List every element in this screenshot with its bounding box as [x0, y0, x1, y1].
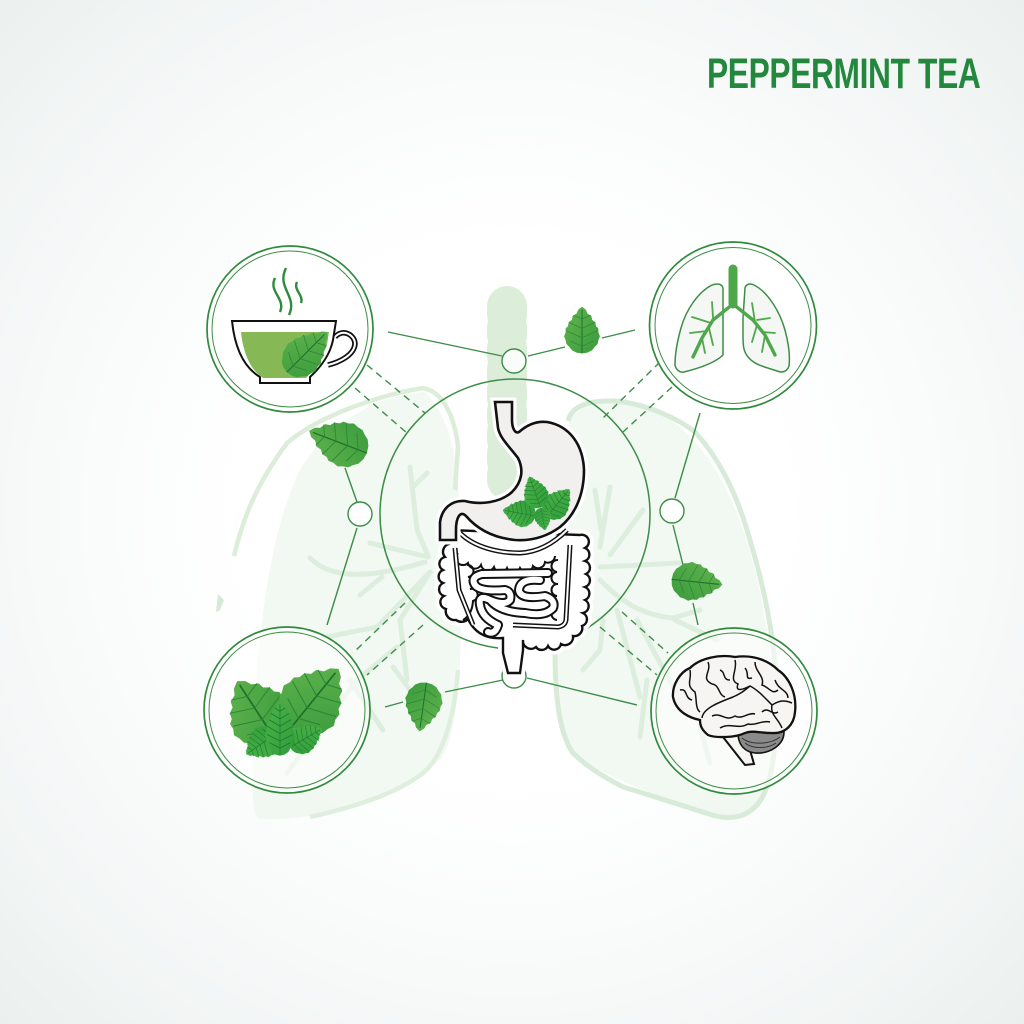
- lung outlines: [675, 284, 789, 372]
- trachea: [728, 269, 738, 304]
- stomach mint: [500, 472, 580, 532]
- background bronchi: [287, 467, 717, 773]
- background lungs: [234, 388, 777, 819]
- small intestine: [474, 573, 554, 633]
- cerebrum: [673, 656, 795, 737]
- mint bunch circle: [204, 627, 370, 793]
- colon inner contours: [456, 553, 558, 620]
- cup handle: [328, 333, 355, 365]
- small background mark: [216, 594, 224, 612]
- left lung base stroke: [310, 670, 458, 817]
- steam: [273, 268, 302, 315]
- left lung outline: [234, 388, 458, 556]
- brain stem: [723, 733, 754, 765]
- cerebellum: [738, 731, 784, 753]
- floating mint leaves: [301, 307, 724, 734]
- sulci: [680, 660, 792, 728]
- connector lines: [327, 330, 700, 707]
- left lung fill: [253, 392, 461, 819]
- cup leaf: [273, 318, 341, 386]
- connector nodes: [348, 349, 684, 688]
- right lung fill: [556, 402, 773, 817]
- colon tubes: [455, 530, 570, 627]
- bronchi: [690, 302, 775, 357]
- cup: [232, 321, 336, 383]
- digestive system: [439, 402, 590, 673]
- central circle: [380, 379, 650, 649]
- stomach: [440, 402, 584, 540]
- title: PEPPERMINT TEA: [707, 50, 980, 98]
- tea: [241, 332, 329, 378]
- right lung outline: [555, 401, 777, 818]
- large intestine silhouette: [439, 530, 590, 673]
- brain circle: [651, 628, 817, 794]
- background trachea: [488, 306, 526, 480]
- tea cup circle: [207, 246, 373, 412]
- lungs circle: [650, 242, 816, 409]
